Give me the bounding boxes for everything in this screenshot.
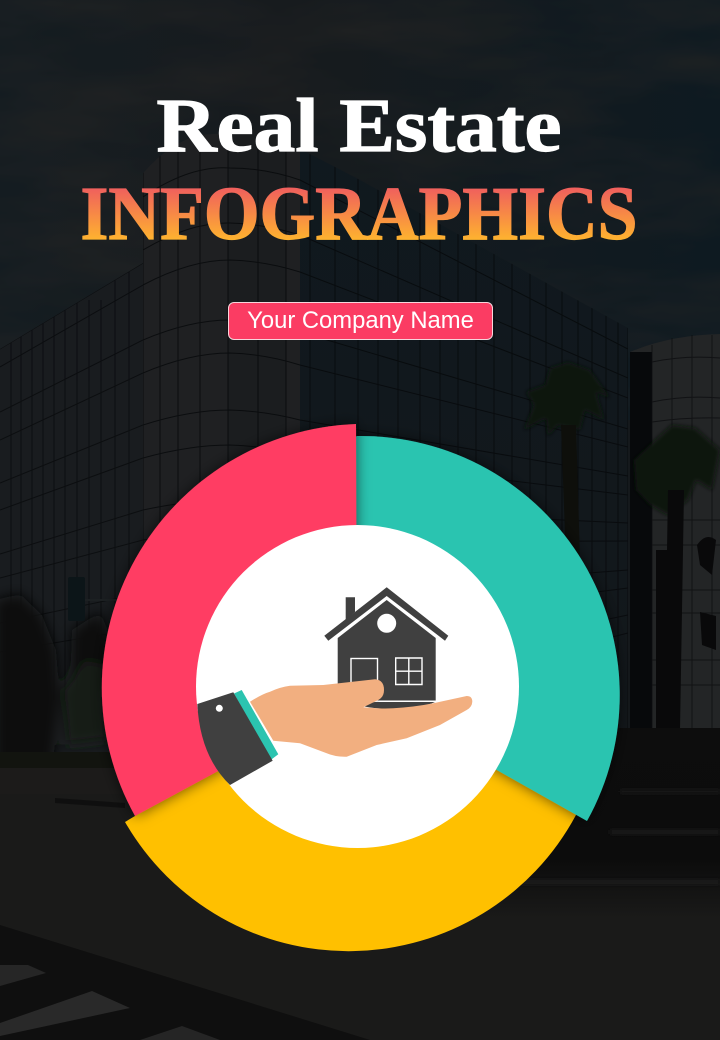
segment: yellow <box>125 660 576 951</box>
right tower <box>630 334 720 740</box>
center white circle <box>196 525 519 848</box>
title: INFOGRAPHICS: INFOGRAPHICS <box>80 172 638 256</box>
company name pill <box>228 302 493 340</box>
sidewalk <box>0 768 125 794</box>
icon: hand <box>250 679 472 757</box>
motion streaks <box>520 790 720 884</box>
icon: house on a hand <box>197 587 472 785</box>
icon: house <box>324 587 448 709</box>
traffic light <box>68 577 85 621</box>
trees and street furniture on left <box>0 577 140 770</box>
donut chart <box>102 424 620 951</box>
palm trees <box>524 362 720 730</box>
dark road right <box>480 728 720 950</box>
main tower and facade <box>143 134 628 728</box>
title: Real Estate: Real Estate <box>156 84 562 168</box>
icon: shirt cuff <box>234 690 278 760</box>
clouds <box>0 0 720 420</box>
curb <box>55 798 125 808</box>
segment: teal <box>340 436 620 821</box>
crosswalk <box>0 925 370 1040</box>
segment: red <box>102 424 357 816</box>
company name pill: Your Company Name <box>247 307 474 334</box>
sky <box>0 0 720 420</box>
road <box>0 790 720 1040</box>
left building wing <box>0 263 143 673</box>
icon: sleeve button <box>216 705 223 712</box>
icon: jacket sleeve <box>197 692 273 785</box>
